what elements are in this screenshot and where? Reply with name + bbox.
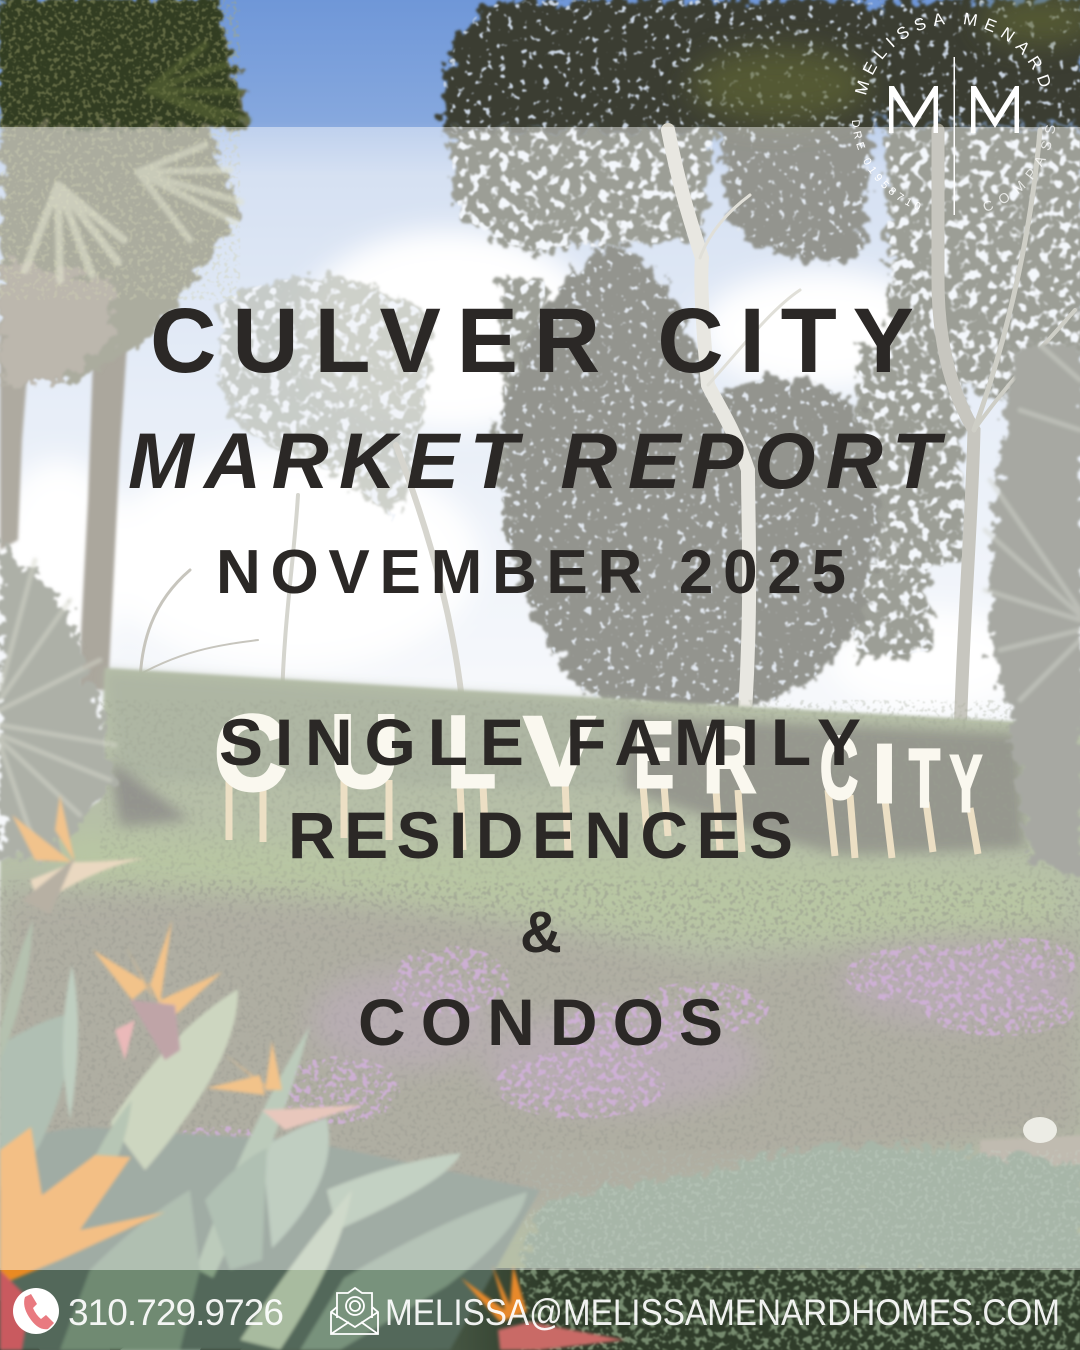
subject: Single Family: SINGLE FAMILY <box>219 705 861 779</box>
subject: Condos: CONDOS <box>358 985 723 1059</box>
green shrubs <box>520 1146 1080 1280</box>
dense tree canopies <box>447 127 1080 660</box>
heading: Market Report: MARKET REPORT <box>128 416 946 505</box>
hillside <box>0 668 1080 1350</box>
photo sign: Culver City letters: E <box>634 702 674 807</box>
subject: Residences: RESIDENCES <box>288 798 793 872</box>
lower-left palm <box>0 540 115 860</box>
bottom strip foliage <box>0 1268 1080 1350</box>
heading: Culver City: CULVER CITY <box>150 290 914 392</box>
flowering ground cover <box>0 880 1080 1250</box>
photo sign: Culver City letters: I <box>873 727 896 820</box>
mulch and rocks <box>980 1135 1080 1170</box>
icon: email envelope <box>331 1288 378 1334</box>
photo sign: Culver City letters: T <box>909 733 940 824</box>
photo sign: Culver City letters: V <box>524 696 595 806</box>
icon: phone <box>13 1288 59 1334</box>
palm trunks <box>0 320 128 690</box>
ring text: brokerage: COMPASS <box>984 125 1056 211</box>
photo sign: Culver City letters: R <box>703 707 756 812</box>
right palm <box>985 345 1080 880</box>
photo sign: Culver City letters <box>214 692 982 858</box>
lit foliage at the top <box>690 0 1080 123</box>
title block <box>128 290 946 1059</box>
bird of paradise flowers <box>0 795 625 1350</box>
subject: ampersand: & <box>520 900 562 965</box>
ring text: licence number: DRE 01958710 <box>852 120 920 210</box>
photo sign: Culver City letters: L <box>447 695 496 809</box>
tree trunks <box>130 130 1075 745</box>
photo sign: Culver City letters: C <box>820 718 858 817</box>
clouds <box>0 230 1030 710</box>
top-left palm crown <box>0 0 250 385</box>
phone number: 310.729.9726 <box>68 1292 284 1333</box>
brand logo: Melissa Menard monogram <box>852 12 1056 215</box>
contact bar <box>13 1288 1060 1334</box>
photo sign: Culver City letters: Y <box>950 739 982 828</box>
foreground leaves <box>0 920 540 1350</box>
photo sign: Culver City letters: C <box>214 692 287 813</box>
photo sign: Culver City letters: U <box>330 694 399 810</box>
monogram letters <box>889 86 1019 133</box>
ring text: name: MELISSA MENARD <box>854 12 1050 95</box>
date: November 2025: NOVEMBER 2025 <box>216 538 846 607</box>
sign posts <box>229 780 978 858</box>
light tree on the left <box>220 278 432 522</box>
